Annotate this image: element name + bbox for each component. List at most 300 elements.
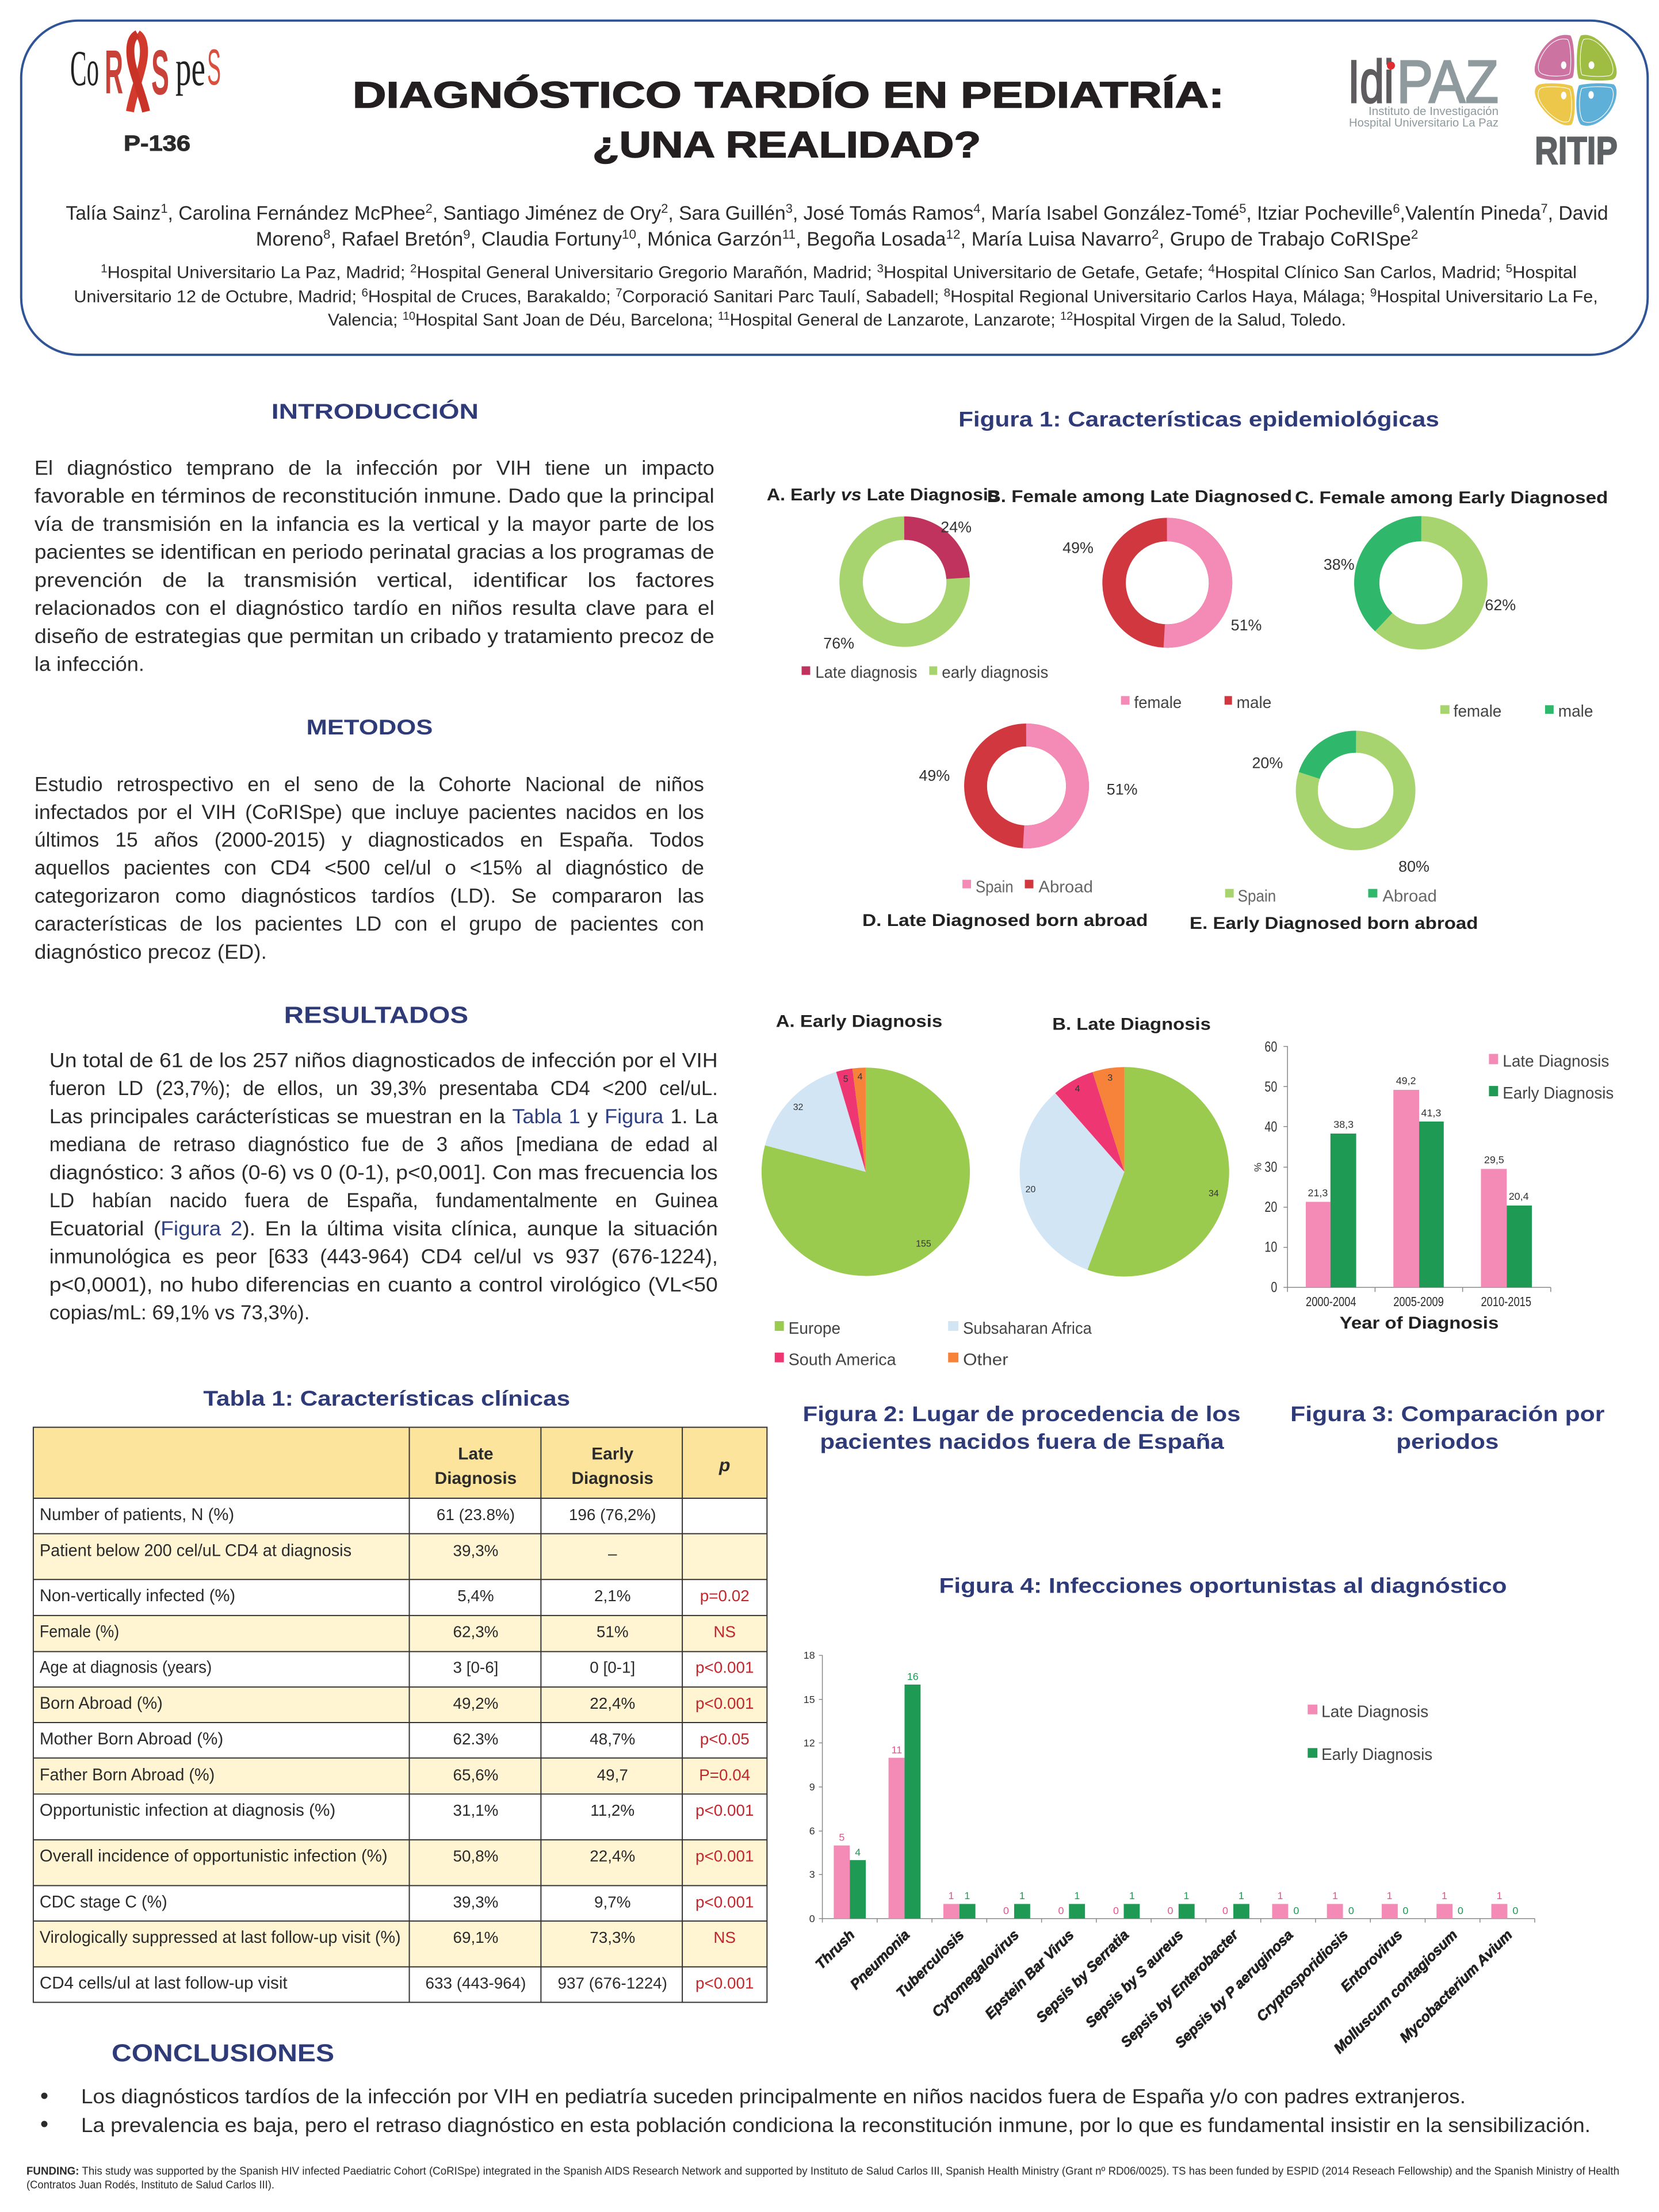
title xyxy=(353,75,1224,166)
authors: 6 xyxy=(1393,201,1400,216)
text block: metodos: características de los pacientes LD con el grupo de pacientes con xyxy=(35,913,704,935)
bar chart: opportunistic infections: 0 xyxy=(1458,1905,1463,1916)
authors: 2 xyxy=(426,201,433,216)
table: características clínicas: CD4 cells/ul at last follow-up visit xyxy=(40,1974,288,1993)
authors: 5 xyxy=(1239,201,1246,216)
donut chart D: D. Late Diagnosed born abroad xyxy=(862,911,1148,930)
bar chart: comparison by period xyxy=(1252,1039,1614,1333)
text block: metodos: aquellos pacientes con CD4 <500 cel/ul o <15% al diagnóstico de xyxy=(35,857,704,879)
table: características clínicas: Female (%) xyxy=(40,1622,119,1641)
heading: figura 4: Figura 4: Infecciones oportunistas al diagnóstico xyxy=(939,1574,1507,1598)
donut chart C: male xyxy=(1558,702,1593,721)
bar chart: opportunistic infections: 5 xyxy=(839,1832,844,1843)
bar chart: comparison by period: 2010-2015 xyxy=(1481,1294,1531,1309)
table: características clínicas: 9,7% xyxy=(594,1893,630,1911)
funding note: (Contratos Juan Rodés, Instituto de Salud Carlos III). xyxy=(26,2179,274,2191)
affiliations: Hospital de Cruces, Barakaldo; xyxy=(368,287,616,306)
pie chart B: late diagnosis: 3 xyxy=(1107,1073,1113,1083)
donut chart E: Spain xyxy=(1238,887,1276,905)
bar chart: comparison by period: 30 xyxy=(1264,1159,1277,1175)
pie chart B: late diagnosis xyxy=(1020,1015,1229,1276)
heading: resultados: RESULTADOS xyxy=(284,1002,468,1028)
table: características clínicas: 50,8% xyxy=(453,1847,498,1865)
text block: metodos: categorizaron como diagnósticos tardíos (LD). Se compararon las xyxy=(35,885,704,907)
affiliations: 9 xyxy=(1370,286,1377,299)
bar chart: opportunistic infections: Cytomegalovirus xyxy=(929,1927,1022,2020)
table: características clínicas xyxy=(33,1428,767,2002)
donut chart B: male xyxy=(1237,694,1271,712)
text block: resultados: inmunológica es peor [633 (443-964) CD4 cel/ul vs 937 (676-1224), xyxy=(49,1246,718,1268)
table: características clínicas: p<0.001 xyxy=(695,1694,754,1712)
table: características clínicas: Early xyxy=(591,1444,634,1463)
donut chart C: 38% xyxy=(1324,556,1355,573)
authors: , María Isabel González-Tomé xyxy=(980,202,1239,224)
panel: figura 4 xyxy=(804,1574,1535,2057)
table: características clínicas: 39,3% xyxy=(453,1893,498,1911)
table: características clínicas: CDC stage C (%) xyxy=(40,1892,167,1911)
text block: introducción: pacientes se identifican en periodo perinatal gracias a los programas de xyxy=(35,541,714,564)
authors: 9 xyxy=(463,227,471,242)
affiliations: Corporació Sanitari Parc Taulí, Sabadell; xyxy=(622,287,944,306)
bar chart: opportunistic infections: 1 xyxy=(1442,1890,1447,1901)
authors: 2 xyxy=(661,201,668,216)
text block: resultados: Ecuatorial ( Figura 2). En la última visita clínica, aunque la situación xyxy=(49,1218,718,1240)
bar chart: opportunistic infections: 0 xyxy=(1293,1905,1299,1916)
bar chart: opportunistic infections: 0 xyxy=(1222,1905,1228,1916)
pie chart A: early diagnosis: 5 xyxy=(843,1074,848,1084)
bar chart: opportunistic infections: 0 xyxy=(1512,1905,1518,1916)
bar chart: opportunistic infections: 1 xyxy=(1019,1890,1025,1901)
logo: IdiPAZ xyxy=(1348,48,1499,129)
affiliations: Hospital General Universitario Gregorio Marañón, Madrid; xyxy=(417,263,877,282)
bar chart: opportunistic infections: 1 xyxy=(1074,1890,1080,1901)
affiliations: Hospital Clínico San Carlos, Madrid; xyxy=(1215,263,1506,282)
bar chart: comparison by period: 21,3 xyxy=(1308,1187,1328,1199)
text block: introducción: favorable en términos de reconstitución inmune. Dado que la principal xyxy=(35,485,714,507)
bar chart: comparison by period: 29,5 xyxy=(1484,1154,1504,1165)
bar chart: opportunistic infections: Early Diagnosis xyxy=(1321,1746,1432,1764)
bar chart: comparison by period: 60 xyxy=(1264,1039,1277,1055)
panel: header xyxy=(21,21,1647,355)
bar chart: opportunistic infections: Tuberculosis xyxy=(893,1927,968,2001)
heading: figura 2 xyxy=(803,1402,1241,1453)
bullet list: conclusiones: La prevalencia es baja, pero el retraso diagnóstico en esta población condiciona la reconstitución inmune, por lo que es fundamental insistir en la sensibilización. xyxy=(81,2114,1591,2137)
authors: 1 xyxy=(160,201,168,216)
logo: CoRISpeS xyxy=(70,34,221,112)
table: características clínicas: 196 (76,2%) xyxy=(569,1506,656,1524)
table: características clínicas: Mother Born Abroad (%) xyxy=(40,1729,223,1748)
bar chart: comparison by period: 50 xyxy=(1264,1079,1277,1095)
bar chart: comparison by period: 20,4 xyxy=(1509,1191,1529,1202)
authors: Moreno xyxy=(256,228,322,250)
bar chart: opportunistic infections: 12 xyxy=(804,1737,815,1748)
bar chart: opportunistic infections: Sepsis by Serratia xyxy=(1033,1927,1132,2026)
text block: resultados: LD habían nacido fuera de España, fundamentalmente en Guinea xyxy=(49,1189,718,1212)
text block: metodos: últimos 15 años (2000-2015) y diagnosticados en España. Todos xyxy=(35,829,704,851)
text block: resultados: copias/mL: 69,1% vs 73,3%). xyxy=(49,1302,309,1324)
affiliations: Hospital xyxy=(1512,263,1577,282)
bar chart: opportunistic infections: 18 xyxy=(804,1650,815,1661)
table: características clínicas: 49,2% xyxy=(453,1694,498,1712)
bar chart: comparison by period: 2005-2009 xyxy=(1393,1294,1444,1309)
table: características clínicas: 0 [0-1] xyxy=(590,1658,635,1676)
pie chart A: early diagnosis: 155 xyxy=(916,1239,931,1249)
panel: resultados xyxy=(49,1002,718,1324)
bar chart: opportunistic infections: Sepsis by S aureus xyxy=(1083,1927,1187,2031)
donut chart D: 49% xyxy=(919,767,950,784)
bar chart: opportunistic infections: 6 xyxy=(809,1826,815,1837)
table: características clínicas: NS xyxy=(713,1623,736,1641)
authors xyxy=(66,201,1608,250)
funding note: FUNDING: This study was supported by the Spanish HIV infected Paediatric Cohort (CoRISpe) integrated in the Spanish AIDS Research Network and supported by Instituto de Salud Carlos III, Spanish Health Ministry (Grant nº RD06/0025). TS has been funded by ESPID (2014 Reseach Fellowship) and the Spanish Ministry of Health xyxy=(26,2165,1619,2177)
authors: , Claudia Fortuny xyxy=(471,228,622,250)
authors: 4 xyxy=(973,201,980,216)
heading: metodos: METODOS xyxy=(306,715,433,739)
donut chart A: 76% xyxy=(823,635,854,652)
affiliations: Hospital Universitario La Fe, xyxy=(1377,287,1598,306)
pie chart B: late diagnosis: B. Late Diagnosis xyxy=(1052,1015,1211,1034)
text block: introducción: la infección. xyxy=(35,653,144,676)
table: características clínicas: Non-vertically infected (%) xyxy=(40,1586,235,1605)
bar chart: comparison by period: 2000-2004 xyxy=(1306,1294,1356,1309)
affiliations: 5 xyxy=(1506,263,1512,275)
pie chart B: late diagnosis: 20 xyxy=(1026,1185,1035,1195)
donut chart D: Abroad xyxy=(1038,878,1093,897)
authors: , Grupo de Trabajo CoRISpe xyxy=(1159,228,1411,250)
donut chart A: 24% xyxy=(941,519,972,536)
table: características clínicas: p<0.001 xyxy=(695,1658,754,1676)
table: características clínicas: 3 [0-6] xyxy=(453,1658,498,1676)
table: características clínicas: Born Abroad (%) xyxy=(40,1694,163,1713)
bar chart: opportunistic infections: 1 xyxy=(1183,1890,1189,1901)
pie chart A: early diagnosis: A. Early Diagnosis xyxy=(776,1012,942,1031)
affiliations: 2 xyxy=(410,263,417,275)
bar chart: opportunistic infections: 0 xyxy=(1402,1905,1408,1916)
authors: 2 xyxy=(1411,227,1418,242)
bullet list: conclusiones xyxy=(41,2085,1591,2137)
bar chart: opportunistic infections: 1 xyxy=(1129,1890,1135,1901)
donut chart A: Late diagnosis xyxy=(815,663,917,682)
text block: introducción: El diagnóstico temprano de la infección por VIH tiene un impacto xyxy=(35,457,714,479)
authors: , María Luisa Navarro xyxy=(960,228,1152,250)
authors: , Begoña Losada xyxy=(796,228,946,250)
panel: figura 1 xyxy=(767,408,1608,933)
table: características clínicas: Diagnosis xyxy=(435,1469,517,1488)
donut chart C xyxy=(1295,488,1608,721)
funding note xyxy=(26,2165,1619,2191)
donut chart E: 80% xyxy=(1398,858,1429,875)
bar chart: opportunistic infections: Mycobacterium Avium xyxy=(1397,1927,1516,2046)
authors: 7 xyxy=(1541,201,1548,216)
affiliations: Hospital Universitario de Getafe, Getafe; xyxy=(884,263,1208,282)
title: DIAGNÓSTICO TARDÍO EN PEDIATRÍA: xyxy=(353,75,1224,116)
pie chart A: early diagnosis: 32 xyxy=(793,1103,804,1112)
text block: introducción: diseño de estrategias que permitan un cribado y tratamiento precoz de xyxy=(35,625,714,648)
table: características clínicas: 2,1% xyxy=(594,1587,630,1605)
table: características clínicas: 22,4% xyxy=(590,1847,635,1865)
text block: metodos: Estudio retrospectivo en el seno de la Cohorte Nacional de niños xyxy=(35,773,704,795)
bar chart: opportunistic infections: 0 xyxy=(1168,1905,1173,1916)
table: características clínicas: 51% xyxy=(597,1623,629,1641)
affiliations: 10 xyxy=(403,310,415,323)
logo: IdiPAZ: PAZ xyxy=(1397,48,1499,116)
text block: resultados: mediana de retraso diagnóstico fue de 3 años [mediana de edad al xyxy=(49,1134,718,1156)
text block: introducción xyxy=(35,457,714,676)
affiliations: Universitario 12 de Octubre, Madrid; xyxy=(74,287,349,306)
table: características clínicas: Diagnosis xyxy=(571,1469,653,1488)
authors: 10 xyxy=(622,227,636,242)
bar chart: comparison by period: Late Diagnosis xyxy=(1503,1052,1609,1070)
table: características clínicas: 48,7% xyxy=(590,1730,635,1748)
bar chart: comparison by period: Early Diagnosis xyxy=(1503,1084,1614,1103)
table: características clínicas: Opportunistic infection at diagnosis (%) xyxy=(40,1801,335,1820)
table: características clínicas: 73,3% xyxy=(590,1928,635,1946)
legend: pie charts: Other xyxy=(963,1351,1008,1369)
authors: 8 xyxy=(323,227,330,242)
text block: introducción: relacionados con el diagnóstico tardío en niños resulta clave para el xyxy=(35,597,714,619)
heading: figura 1: Figura 1: Características epidemiológicas xyxy=(958,408,1439,431)
table: características clínicas: Overall incidence of opportunistic infection (%) xyxy=(40,1847,388,1866)
bar chart: opportunistic infections: 15 xyxy=(804,1694,815,1705)
affiliations: Hospital General de Lanzarote, Lanzarote; xyxy=(730,311,1060,330)
text block: metodos: infectados por el VIH (CoRISpe) que incluye pacientes nacidos en los xyxy=(35,801,704,824)
text block: resultados: Las principales carácterísticas se muestran en la Tabla 1 y Figura 1. La xyxy=(49,1105,718,1128)
affiliations: 4 xyxy=(1208,263,1215,275)
table: características clínicas: p<0.001 xyxy=(695,1847,754,1865)
logo: IdiPAZ: Instituto de Investigación xyxy=(1369,105,1499,118)
donut chart B: female xyxy=(1134,694,1182,712)
poster number: P-136 xyxy=(124,132,190,156)
table: características clínicas: 5,4% xyxy=(457,1587,494,1605)
affiliations: 7 xyxy=(616,286,622,299)
table: características clínicas: 31,1% xyxy=(453,1801,498,1819)
table: características clínicas: p=0.02 xyxy=(700,1587,750,1605)
panel: figura 3 xyxy=(1252,1039,1614,1453)
bar chart: opportunistic infections: 4 xyxy=(855,1846,861,1858)
panel: conclusiones xyxy=(41,2039,1591,2137)
affiliations: 8 xyxy=(944,286,950,299)
bar chart: opportunistic infections: Late Diagnosis xyxy=(1321,1703,1428,1721)
logo: IdiPAZ: Idi xyxy=(1348,48,1394,116)
panel: header: S xyxy=(207,39,221,95)
heading: figura 3 xyxy=(1290,1402,1604,1453)
donut chart B xyxy=(987,487,1292,712)
text block: metodos: diagnóstico precoz (ED). xyxy=(35,941,267,963)
bar chart: comparison by period: % xyxy=(1252,1162,1263,1172)
table: características clínicas: P=0.04 xyxy=(699,1766,750,1784)
legend: pie charts: South America xyxy=(789,1351,897,1369)
table: características clínicas: Virologically suppressed at last follow-up visit (%) xyxy=(40,1928,401,1947)
affiliations: 3 xyxy=(877,263,884,275)
donut chart C: 62% xyxy=(1485,596,1516,614)
header rounded frame xyxy=(21,21,1647,355)
donut chart D xyxy=(862,735,1148,930)
table: características clínicas: Father Born Abroad (%) xyxy=(40,1765,215,1784)
donut chart E: Abroad xyxy=(1382,887,1437,905)
affiliations: Hospital Universitario La Paz, Madrid; xyxy=(108,263,410,282)
table: características clínicas: 69,1% xyxy=(453,1928,498,1946)
affiliations: 12 xyxy=(1060,310,1073,323)
donut chart B: B. Female among Late Diagnosed xyxy=(987,487,1292,506)
panel: metodos xyxy=(35,715,704,963)
donut chart E: E. Early Diagnosed born abroad xyxy=(1190,914,1478,933)
table: características clínicas: 62,3% xyxy=(453,1623,498,1641)
bar chart: opportunistic infections: 9 xyxy=(809,1781,815,1793)
bar chart: opportunistic infections: Molluscum contagiosum xyxy=(1331,1927,1461,2057)
bar chart: comparison by period: Year of Diagnosis xyxy=(1340,1314,1499,1333)
donut chart B: 51% xyxy=(1231,617,1262,634)
table: características clínicas: NS xyxy=(713,1928,736,1946)
table: características clínicas: p<0.05 xyxy=(700,1730,750,1748)
affiliations: 11 xyxy=(718,310,730,323)
heading: figura 3: periodos xyxy=(1396,1430,1499,1453)
authors: ,Valentín Pineda xyxy=(1400,202,1541,224)
affiliations: 6 xyxy=(361,286,368,299)
authors: Talía Sainz xyxy=(66,202,161,224)
donut chart B: 49% xyxy=(1062,539,1094,557)
affiliations: Hospital Virgen de la Salud, Toledo. xyxy=(1073,311,1346,330)
logo: CoRISpeS: S xyxy=(151,37,169,108)
bar chart: opportunistic infections: 16 xyxy=(907,1671,919,1682)
panel: introducción xyxy=(35,399,714,676)
authors: , David xyxy=(1548,202,1608,224)
bar chart: opportunistic infections: Epstein Bar Virus xyxy=(982,1927,1077,2022)
authors: , Sara Guillén xyxy=(668,202,786,224)
logo: RITIP xyxy=(1535,35,1618,173)
bar chart: opportunistic infections: 1 xyxy=(1238,1890,1244,1901)
logo: IdiPAZ: Hospital Universitario La Paz xyxy=(1349,117,1499,129)
bar chart: comparison by period: 0 xyxy=(1271,1279,1277,1295)
table: características clínicas: 937 (676-1224) xyxy=(558,1974,667,1992)
authors: 11 xyxy=(782,227,796,242)
affiliations: Valencia; xyxy=(328,311,397,330)
bar chart: opportunistic infections: 3 xyxy=(809,1869,815,1880)
panel: tabla 1 xyxy=(33,1387,767,2002)
text block: introducción: vía de transmisión en la infancia es la vertical y la mayor parte de los xyxy=(35,513,714,535)
pie chart A: early diagnosis: 4 xyxy=(858,1072,863,1082)
text block: resultados: Un total de 61 de los 257 niños diagnosticados de infección por el VIH xyxy=(49,1049,718,1071)
table: características clínicas: Late xyxy=(458,1444,494,1463)
heading: introducción: INTRODUCCIÓN xyxy=(272,399,479,423)
text block: resultados: p<0,0001), no hubo diferencias en cuanto a control virológico (VL<50 xyxy=(49,1273,718,1296)
bar chart: opportunistic infections: 0 xyxy=(1113,1905,1119,1916)
table: características clínicas: p<0.001 xyxy=(695,1893,754,1911)
bar chart: comparison by period: 38,3 xyxy=(1333,1119,1354,1130)
legend: pie charts: Subsaharan Africa xyxy=(963,1319,1092,1338)
table: características clínicas: 11,2% xyxy=(590,1801,634,1819)
bar chart: opportunistic infections xyxy=(804,1650,1535,2057)
bar chart: opportunistic infections: Cryptosporidiosis xyxy=(1253,1927,1351,2025)
table: características clínicas: Number of patients, N (%) xyxy=(40,1505,234,1524)
bar chart: opportunistic infections: 1 xyxy=(948,1890,954,1901)
bar chart: comparison by period: 10 xyxy=(1264,1239,1277,1256)
table: características clínicas: p<0.001 xyxy=(695,1974,754,1992)
bar chart: comparison by period: 40 xyxy=(1264,1119,1277,1135)
affiliations: Hospital Sant Joan de Déu, Barcelona; xyxy=(415,311,718,330)
text block: resultados: fueron LD (23,7%); de ellos, un 39,3% presentaba CD4 <200 cel/uL. xyxy=(49,1077,718,1100)
text block: resultados xyxy=(49,1049,718,1324)
donut chart E xyxy=(1190,742,1478,933)
table: características clínicas: Age at diagnosis (years) xyxy=(40,1658,212,1677)
bar chart: opportunistic infections: 0 xyxy=(1348,1905,1354,1916)
donut chart C: female xyxy=(1454,702,1501,721)
logo: RITIP: RITIP xyxy=(1535,129,1618,173)
heading: tabla 1: Tabla 1: Características clínicas xyxy=(203,1387,570,1410)
authors: , Mónica Garzón xyxy=(636,228,782,250)
logo: CoRISpeS: Co xyxy=(70,41,99,97)
logo: CoRISpeS: R xyxy=(105,37,123,106)
authors: 3 xyxy=(786,201,793,216)
table: características clínicas: 65,6% xyxy=(453,1766,498,1784)
bar chart: opportunistic infections: 0 xyxy=(1003,1905,1009,1916)
bar chart: opportunistic infections: Sepsis by Enterobacter xyxy=(1118,1926,1242,2050)
affiliations: 1 xyxy=(101,263,108,275)
pie chart A: early diagnosis xyxy=(762,1012,970,1276)
donut chart A: early diagnosis xyxy=(942,663,1048,682)
text block: resultados: diagnóstico: 3 años (0-6) vs 0 (0-1), p<0,001]. Con mas frecuencia los xyxy=(49,1161,718,1184)
table: características clínicas: 22,4% xyxy=(590,1694,635,1712)
table: características clínicas: p xyxy=(718,1455,730,1475)
donut chart A: A. Early vs Late Diagnosis xyxy=(767,485,999,504)
heading: figura 2: pacientes nacidos fuera de España xyxy=(820,1430,1224,1453)
bullet list: conclusiones: Los diagnósticos tardíos de la infección por VIH en pediatría suceden principalmente en niños nacidos fuera de España y/o con padres extranjeros. xyxy=(81,2085,1466,2108)
donut chart E: 20% xyxy=(1252,755,1283,772)
authors: 2 xyxy=(1152,227,1159,242)
bar chart: opportunistic infections: 11 xyxy=(892,1744,902,1755)
authors: , Santiago Jiménez de Ory xyxy=(433,202,661,224)
donut chart A xyxy=(767,485,1048,682)
text block: metodos xyxy=(35,773,704,963)
bar chart: opportunistic infections: 1 xyxy=(1278,1890,1283,1901)
donut chart D: Spain xyxy=(976,878,1014,897)
text block: introducción: prevención de la transmisión vertical, identificar los factores xyxy=(35,569,714,591)
legend: pie charts xyxy=(775,1319,1092,1369)
table: características clínicas: 39,3% xyxy=(453,1541,498,1559)
table: características clínicas: – xyxy=(608,1544,617,1562)
bar chart: opportunistic infections: Pneumonia xyxy=(847,1927,913,1993)
bar chart: opportunistic infections: 1 xyxy=(964,1890,970,1901)
table: características clínicas: p<0.001 xyxy=(695,1801,754,1819)
affiliations xyxy=(74,263,1598,330)
table: características clínicas: 49,7 xyxy=(597,1766,628,1784)
bar chart: opportunistic infections: Sepsis by P aeruginosa xyxy=(1172,1927,1297,2052)
authors: , José Tomás Ramos xyxy=(793,202,973,224)
bar chart: comparison by period: 20 xyxy=(1264,1199,1277,1215)
heading: conclusiones: CONCLUSIONES xyxy=(112,2039,334,2067)
authors: , Itziar Pocheville xyxy=(1246,202,1393,224)
heading: figura 3: Figura 3: Comparación por xyxy=(1290,1402,1604,1426)
authors: 12 xyxy=(946,227,960,242)
table: características clínicas: Patient below 200 cel/uL CD4 at diagnosis xyxy=(40,1541,351,1560)
panel: figura 2 xyxy=(762,1012,1241,1453)
bar chart: opportunistic infections: 1 xyxy=(1387,1890,1393,1901)
title: ¿UNA REALIDAD? xyxy=(592,125,981,166)
legend: pie charts: Europe xyxy=(789,1319,840,1338)
bar chart: opportunistic infections: Thrush xyxy=(812,1927,858,1973)
bar chart: comparison by period: 41,3 xyxy=(1421,1107,1441,1119)
bar chart: opportunistic infections: 1 xyxy=(1497,1890,1503,1901)
authors: , Carolina Fernández McPhee xyxy=(168,202,426,224)
bar chart: opportunistic infections: Entorovirus xyxy=(1337,1927,1406,1995)
bar chart: comparison by period: 49,2 xyxy=(1396,1075,1416,1086)
table: características clínicas: 61 (23.8%) xyxy=(437,1506,515,1524)
pie chart B: late diagnosis: 4 xyxy=(1075,1084,1080,1094)
bar chart: opportunistic infections: 0 xyxy=(1058,1905,1064,1916)
affiliations: Hospital Regional Universitario Carlos Haya, Málaga; xyxy=(950,287,1370,306)
donut chart D: 51% xyxy=(1107,780,1138,798)
table: características clínicas: 62.3% xyxy=(453,1730,498,1748)
authors: , Rafael Bretón xyxy=(330,228,463,250)
